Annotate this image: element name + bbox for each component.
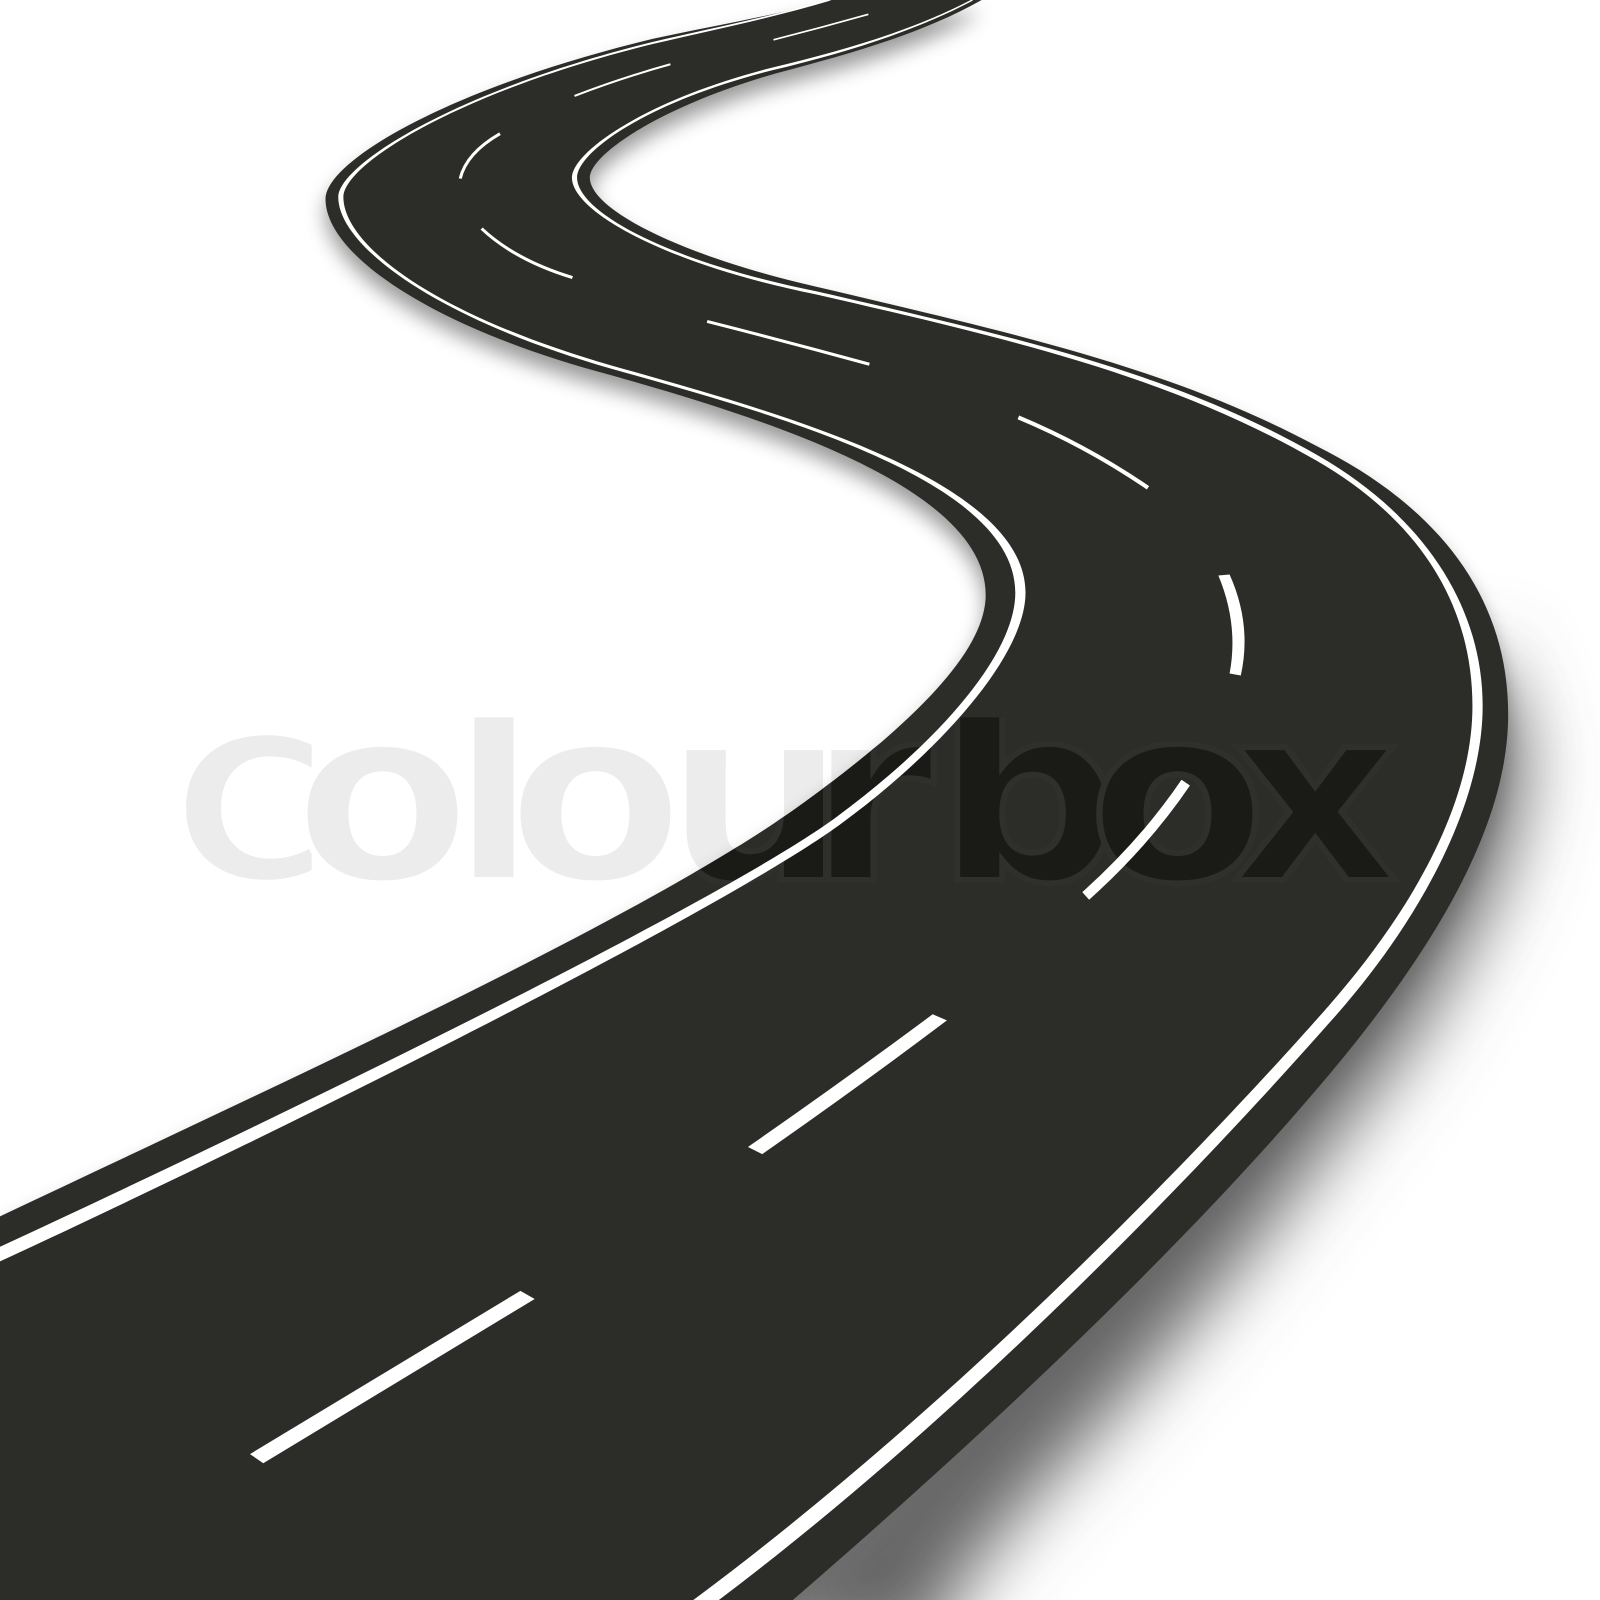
right edge line [572, 0, 1483, 1600]
large cast shadow at lower right [694, 643, 1526, 1600]
left edge line [0, 0, 1026, 1265]
watermark: light part on background [186, 718, 870, 880]
watermark: light part on background: olourbox [293, 655, 1399, 938]
watermark: dark part on road [694, 718, 1389, 880]
watermark: dark part on road: olourbox [293, 655, 1399, 938]
watermark: dark part on road: C [172, 696, 329, 927]
centre lane dashes [250, 14, 1245, 1463]
watermark: light part on background: C [172, 696, 329, 927]
